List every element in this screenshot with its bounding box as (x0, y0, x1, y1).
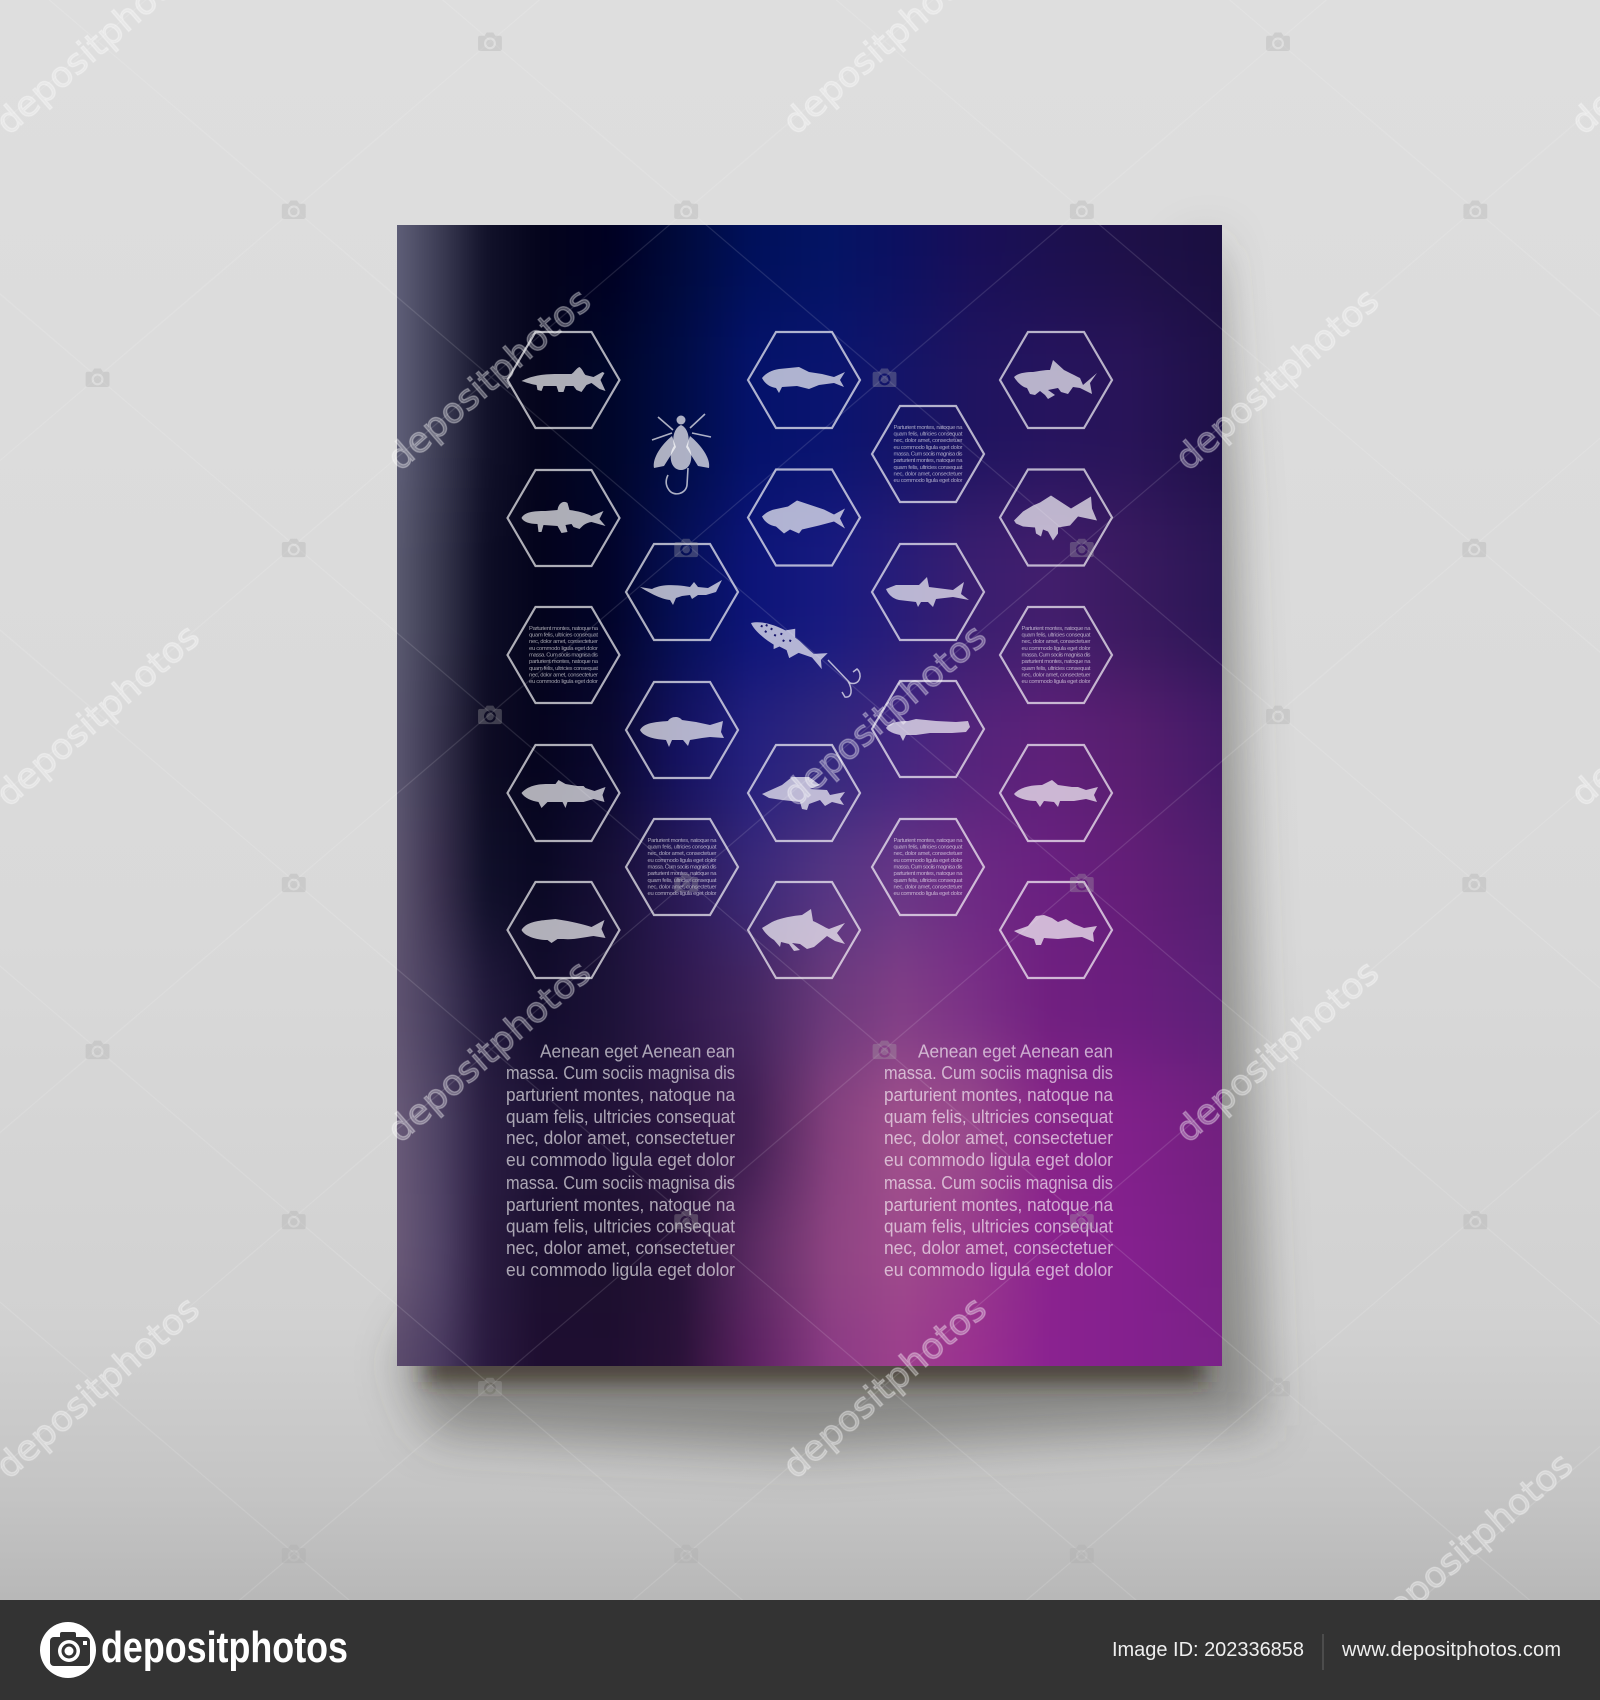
image id: Image ID: 202336858 (1112, 1639, 1304, 1661)
paragraph: right column: Aenean eget Aenean ean (918, 1042, 1113, 1062)
paragraph: right column: quam felis, ultricies consequat (884, 1107, 1113, 1127)
paragraph: left column: parturient montes, natoque na (506, 1085, 736, 1105)
hexagon: text block left: quam felis, ultricies consequat (529, 666, 598, 672)
hexagon: text block lower centre-right: quam felis, ultricies consequat (894, 845, 963, 851)
paragraph: right column: massa. Cum sociis magnisa dis (884, 1063, 1113, 1083)
paragraph: right column: quam felis, ultricies consequat (884, 1216, 1113, 1236)
icon: spoon lure with hook (745, 610, 860, 697)
hexagon: bream (748, 882, 860, 978)
poster panel (397, 225, 1222, 1366)
watermark overlay: depositphotos (775, 617, 995, 815)
hexagon: text block left: massa. Cum sociis magnisa dis (529, 653, 598, 659)
hexagon: text block lower centre-left: massa. Cum sociis magnisa dis (648, 865, 717, 871)
paragraph: left column: parturient montes, natoque na (506, 1195, 736, 1215)
hexagon: text block lower centre-left: nec, dolor amet, consectetuer (648, 851, 717, 857)
hexagon: text block left: nec, dolor amet, consectetuer (529, 639, 598, 645)
logo wordmark: depositphotos (101, 1623, 348, 1672)
hexagon: salmon (626, 682, 738, 778)
hexagon: text block lower centre-right: parturient montes, natoque na (894, 871, 963, 877)
hexagon: text block lower centre-right: eu commodo ligula eget dolor (894, 891, 963, 897)
hexagon: text block lower centre-right: nec, dolor amet, consectetuer (894, 884, 963, 890)
hexagon: text block left: eu commodo ligula eget dolor (529, 646, 598, 652)
paragraph: left column: massa. Cum sociis magnisa dis (506, 1173, 735, 1193)
hexagon: text block left: eu commodo ligula eget dolor (529, 679, 598, 685)
hexagon: text block right: massa. Cum sociis magnisa dis (1022, 653, 1091, 659)
watermark overlay: depositphotos (1168, 281, 1387, 479)
hexagon: text block right: quam felis, ultricies consequat (1022, 666, 1091, 672)
hexagon: text block upper centre-right: nec, dolor amet, consectetuer (894, 471, 963, 477)
watermark overlay: depositphotos (1362, 1445, 1581, 1643)
hexagon: text block right: quam felis, ultricies consequat (1022, 633, 1091, 639)
hexagon: text block upper centre-right: massa. Cum sociis magnisa dis (894, 452, 963, 458)
hexagon: whitefish (508, 470, 620, 566)
hexagon: herring (748, 332, 860, 428)
hexagon: text block lower centre-left: Parturient montes, natoque na (648, 838, 717, 844)
hexagon: text block right (1000, 607, 1112, 703)
paragraph: left column: nec, dolor amet, consectetuer (506, 1238, 735, 1258)
hexagon: grayling (508, 882, 620, 978)
hexagon: text block left: parturient montes, natoque na (529, 659, 599, 665)
hexagon: text block lower centre-right: Parturient montes, natoque na (894, 838, 963, 844)
hexagon: text block left: Parturient montes, natoque na (529, 626, 599, 632)
hexagon: sprat (872, 544, 984, 640)
hexagon: text block upper centre-right (872, 406, 984, 502)
hexagon: text block lower centre-right: quam felis, ultricies consequat (894, 878, 963, 884)
paragraph: left column: quam felis, ultricies consequat (506, 1107, 735, 1127)
paragraph: left column: eu commodo ligula eget dolor (506, 1260, 735, 1280)
hexagon: text block lower centre-left: eu commodo ligula eget dolor (648, 891, 717, 897)
hexagon: text block upper centre-right: eu commodo ligula eget dolor (894, 445, 963, 451)
paragraph: left column: massa. Cum sociis magnisa dis (506, 1063, 735, 1083)
hexagon: pike (508, 332, 620, 428)
hexagon: text block right: parturient montes, natoque na (1022, 659, 1091, 665)
paragraph: left column (506, 1042, 736, 1280)
paragraph: right column: nec, dolor amet, consectetuer (884, 1238, 1113, 1258)
hexagon: text block left: nec, dolor amet, consectetuer (529, 672, 598, 678)
hexagon: text block right: nec, dolor amet, consectetuer (1022, 672, 1091, 678)
paragraph: right column: parturient montes, natoque na (884, 1085, 1114, 1105)
hexagon: text block lower centre-left: eu commodo ligula eget dolor (648, 858, 717, 864)
hexagon: text block right: nec, dolor amet, consectetuer (1022, 639, 1091, 645)
hexagon: text block lower centre-right: nec, dolor amet, consectetuer (894, 851, 963, 857)
icon: camera logo (40, 1622, 96, 1678)
hexagon: text block upper centre-right: quam felis, ultricies consequat (894, 432, 963, 438)
hexagon: text block left: quam felis, ultricies consequat (529, 633, 598, 639)
paragraph: left column: nec, dolor amet, consectetuer (506, 1128, 735, 1148)
hexagon: text block upper centre-right: eu commodo ligula eget dolor (894, 478, 963, 484)
poster drop shadow (402, 235, 1264, 1450)
paragraph: right column: parturient montes, natoque na (884, 1195, 1114, 1215)
hexagon: text block lower centre-left: nec, dolor amet, consectetuer (648, 884, 717, 890)
watermark overlay: depositphotos (1168, 953, 1387, 1151)
hexagon: text block lower centre-left: quam felis, ultricies consequat (648, 845, 717, 851)
watermark overlay: depositphotos (380, 281, 599, 479)
paragraph: right column: eu commodo ligula eget dolor (884, 1260, 1113, 1280)
hexagon: text block lower centre-left: quam felis, ultricies consequat (648, 878, 717, 884)
paragraph: right column: eu commodo ligula eget dolor (884, 1150, 1113, 1170)
footer divider (1322, 1634, 1324, 1670)
hexagon: chub (1000, 332, 1112, 428)
paragraph: right column: nec, dolor amet, consectetuer (884, 1128, 1113, 1148)
website url: www.depositphotos.com (1341, 1639, 1561, 1661)
hexagon: carp (1000, 470, 1112, 566)
hexagon: char (1000, 745, 1112, 841)
paragraph: left column: Aenean eget Aenean ean (540, 1042, 735, 1062)
hexagon: text block lower centre-right: eu commodo ligula eget dolor (894, 858, 963, 864)
footer bar (0, 1600, 1600, 1700)
hexagon: text block upper centre-right: quam felis, ultricies consequat (894, 465, 963, 471)
hexagon: perch pair (748, 745, 860, 841)
watermark overlay: depositphotos (380, 953, 599, 1151)
gradient background of poster (397, 225, 1222, 1366)
hexagon: text block right: eu commodo ligula eget dolor (1022, 679, 1091, 685)
hexagon: text block lower centre-right (872, 819, 984, 915)
hexagon: text block left (508, 607, 620, 703)
hexagon: ruffe (1000, 882, 1112, 978)
watermark overlay: depositphotos (775, 1289, 995, 1487)
hexagon: text block right: Parturient montes, natoque na (1022, 626, 1091, 632)
paragraph: left column: quam felis, ultricies consequat (506, 1216, 735, 1236)
hexagon: text block upper centre-right: parturient montes, natoque na (894, 458, 963, 464)
hexagon: text block lower centre-left: parturient montes, natoque na (648, 871, 717, 877)
hexagon: roach (748, 470, 860, 566)
paragraph: right column: massa. Cum sociis magnisa dis (884, 1173, 1113, 1193)
hexagon: text block lower centre-left (626, 819, 738, 915)
hexagon: trout (508, 745, 620, 841)
hexagon: catfish (872, 681, 984, 777)
hexagon: text block lower centre-right: massa. Cum sociis magnisa dis (894, 865, 963, 871)
hexagon: sturgeon (626, 544, 738, 640)
paragraph: right column (884, 1042, 1114, 1280)
hexagon: text block right: eu commodo ligula eget dolor (1022, 646, 1091, 652)
icon: fly fishing lure (652, 414, 711, 494)
hexagon: text block upper centre-right: Parturient montes, natoque na (894, 425, 963, 431)
hexagon: text block upper centre-right: nec, dolor amet, consectetuer (894, 438, 963, 444)
paragraph: left column: eu commodo ligula eget dolor (506, 1150, 735, 1170)
